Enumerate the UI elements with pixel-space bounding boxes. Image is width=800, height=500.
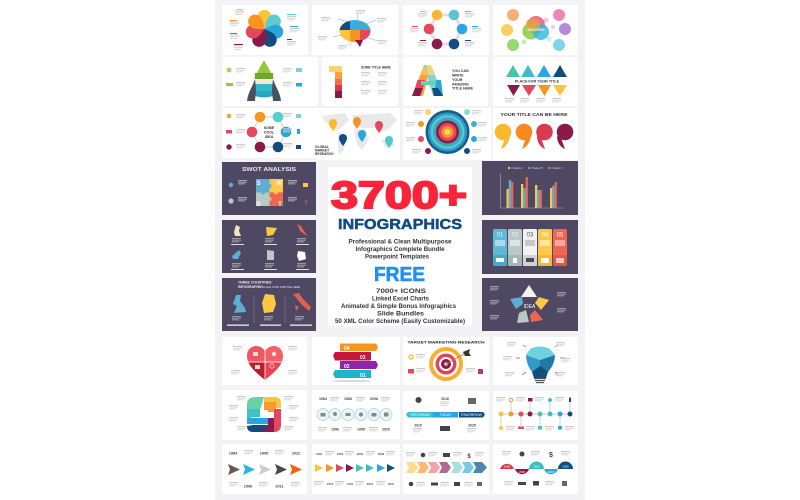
rocket body xyxy=(254,60,274,78)
rocket fins xyxy=(247,79,281,101)
legend: Product A xyxy=(512,167,523,170)
card: ribbons: 01 xyxy=(360,373,366,379)
description xyxy=(348,238,452,260)
flower petals xyxy=(244,10,285,49)
ribbon bars xyxy=(333,344,378,378)
years: 1991 xyxy=(347,482,354,486)
card 04: 04 xyxy=(542,232,549,238)
SWOT heading: SWOT ANALYSIS xyxy=(242,167,297,173)
years: 2000 xyxy=(357,452,364,456)
title text xyxy=(452,69,474,90)
years: 2001 xyxy=(367,482,374,486)
arrow xyxy=(446,349,471,364)
free badge: FREE xyxy=(374,264,425,286)
years xyxy=(316,452,395,486)
SWOT puzzle: T xyxy=(278,202,282,208)
panel: numbered cards xyxy=(482,220,578,274)
card: hexagon cycle xyxy=(403,5,489,55)
card: wave timeline: 2018 xyxy=(548,470,555,474)
upward triangles xyxy=(506,65,520,77)
years: 1995 xyxy=(260,452,268,456)
card 02: 02 xyxy=(512,232,519,238)
arrows xyxy=(228,464,302,475)
description: Infographics Complete Bundle xyxy=(356,246,445,253)
card: concentric target xyxy=(403,108,491,160)
target xyxy=(429,347,463,381)
card: ribbons xyxy=(312,337,400,385)
card: speech bubbles xyxy=(493,108,578,160)
card: yesterday today tomorrow: TODAY xyxy=(440,413,452,417)
years: 1984 xyxy=(316,452,323,456)
chevrons xyxy=(406,462,487,473)
panel: idea star: IDEA xyxy=(524,304,536,310)
years: 1975 xyxy=(327,482,334,486)
heading: YOUR TITLE CAN BE HERE xyxy=(500,112,568,117)
card: wave timeline: $ xyxy=(549,452,553,459)
bubbles xyxy=(501,9,571,51)
chart axes xyxy=(500,173,563,208)
bubbles xyxy=(495,124,573,149)
years: 2008 xyxy=(370,397,378,401)
circles xyxy=(317,408,392,420)
chart bars xyxy=(506,177,557,208)
card: dot timeline xyxy=(493,391,578,440)
card: triangles: PLACE FOR YOUR TITLE xyxy=(515,80,560,84)
feature list: Slide Bundles xyxy=(377,310,424,318)
legend xyxy=(508,167,563,170)
card: wave timeline: 1995 xyxy=(504,464,511,468)
panel title: INFOGRAPHICPLACE YOUR SUBTITLE HERE xyxy=(238,285,300,289)
title text: YOUR xyxy=(452,78,463,82)
rings xyxy=(426,110,470,154)
SWOT puzzle xyxy=(256,179,283,208)
headline word: INFOGRAPHICS xyxy=(338,217,462,233)
years: 1984 xyxy=(229,452,238,456)
years: 1995 xyxy=(357,428,365,432)
years: 2015 xyxy=(414,424,422,428)
panel: idea star xyxy=(482,278,578,331)
map title: RESEARCH xyxy=(315,152,334,156)
years: 2025 xyxy=(468,424,476,428)
card: wave timeline xyxy=(493,444,578,494)
card: chevron arrows xyxy=(403,444,489,494)
brain stem xyxy=(355,40,363,47)
SWOT puzzle: S xyxy=(256,181,261,187)
card: number one: SOME TITLE HERE xyxy=(361,66,392,70)
years xyxy=(414,397,476,428)
years xyxy=(229,452,300,488)
feature list xyxy=(335,288,465,325)
panel: six countries xyxy=(222,220,316,273)
card 05: 05 xyxy=(557,232,564,238)
card: yesterday today tomorrow xyxy=(403,391,489,440)
card: world map xyxy=(315,108,400,160)
card: wave timeline: 2000 xyxy=(519,470,526,474)
card: success bubbles: SUCCESS xyxy=(528,28,545,32)
card: wave timeline: 2013 xyxy=(533,464,540,468)
card: arrowheads five xyxy=(222,444,307,494)
panel: three countries xyxy=(222,278,316,331)
background column xyxy=(215,0,585,500)
years: 1996 xyxy=(331,428,339,432)
card: chevron arrows: $ xyxy=(467,454,471,460)
country maps xyxy=(233,293,311,313)
map pins xyxy=(329,117,393,148)
years: 2031 xyxy=(388,482,395,486)
headline number: 3700+ xyxy=(331,175,467,217)
card: ribbons: 02 xyxy=(344,364,350,370)
card: flower diagram xyxy=(222,5,308,55)
years: 1996 xyxy=(244,484,252,488)
card 01: 01 xyxy=(497,232,504,238)
panel: bar chart xyxy=(482,161,578,215)
title text: TITLE HERE xyxy=(452,86,474,90)
card: triangles xyxy=(493,57,578,106)
years: 2018 xyxy=(441,397,449,401)
timeline dots xyxy=(498,412,572,416)
title panel xyxy=(328,167,472,326)
cycle ring xyxy=(429,15,462,44)
feature list: 7000+ ICONS xyxy=(376,288,427,295)
card: letter A xyxy=(403,57,488,106)
years: 2008 xyxy=(378,452,385,456)
card: yesterday today tomorrow: YESTERDAY xyxy=(410,413,431,417)
center label: IDEA xyxy=(265,135,274,139)
arrows xyxy=(315,464,395,472)
card: light bulb xyxy=(493,337,578,385)
star segments xyxy=(510,285,549,323)
map title: GLOBAL xyxy=(315,145,329,149)
card: puzzle brain xyxy=(312,5,398,55)
card 03: 03 xyxy=(527,232,534,238)
title text: YOU CAN xyxy=(452,69,469,73)
card: arrowheads eight xyxy=(312,444,400,494)
card: heart xyxy=(222,337,307,385)
feature list: Animated & Simple Bonus Infographics xyxy=(341,303,456,310)
center label: COOL xyxy=(264,130,275,134)
card: yesterday today tomorrow: TOMORROW xyxy=(460,413,482,417)
title text: WRITE xyxy=(452,74,464,78)
description: Professional & Clean Multipurpose xyxy=(348,238,452,246)
card: rocket xyxy=(222,57,318,106)
heart quadrants xyxy=(247,346,283,380)
SWOT puzzle: O xyxy=(256,202,261,208)
card: number one xyxy=(322,57,398,106)
years: 2022 xyxy=(292,452,300,456)
years: 1983 xyxy=(344,397,352,401)
downward triangles xyxy=(507,85,520,96)
letter shape xyxy=(412,65,431,96)
card: swirl square xyxy=(222,390,307,440)
numeral 1 xyxy=(329,66,342,72)
title text: AMAZING xyxy=(452,82,469,86)
description: Powerpoint Templates xyxy=(365,254,429,260)
card: idea hexagon xyxy=(222,108,318,158)
years: 2011 xyxy=(275,484,284,488)
years xyxy=(319,397,390,432)
SWOT puzzle: W xyxy=(276,181,282,187)
panel: SWOT analysis xyxy=(222,162,316,215)
brain pieces xyxy=(340,20,370,42)
country shapes xyxy=(232,224,308,261)
card: ribbons: 03 xyxy=(360,355,366,361)
card: success bubbles xyxy=(493,5,578,55)
feature list: 50 XML Color Scheme (Easily Customizable) xyxy=(335,318,465,325)
years: 2020 xyxy=(382,428,390,432)
legend: Product C xyxy=(552,167,563,170)
legend: Product B xyxy=(532,167,543,170)
panel: SWOT analysis: S xyxy=(304,200,308,206)
years: 1983 xyxy=(337,452,344,456)
bulb xyxy=(526,346,555,383)
panel title xyxy=(238,280,300,289)
map continents xyxy=(322,113,397,155)
center label: SOME xyxy=(264,126,275,130)
panel title: THREE COUNTRIES xyxy=(238,280,272,284)
swirl bands xyxy=(247,397,281,432)
heading: TARGET MARKETING RESEARCH xyxy=(408,340,485,344)
timeline bars xyxy=(406,412,485,418)
feature list: Linked Excel Charts xyxy=(372,296,429,302)
card: ribbons: 04 xyxy=(344,346,350,352)
card: wave timeline: 2025 xyxy=(562,464,569,468)
map title: MARKET xyxy=(315,148,329,152)
card: year circles timeline xyxy=(312,390,400,439)
card: target marketing xyxy=(403,337,489,385)
map title xyxy=(315,145,334,156)
center label xyxy=(264,126,275,139)
years: 1984 xyxy=(319,397,327,401)
wave segments xyxy=(500,462,573,474)
